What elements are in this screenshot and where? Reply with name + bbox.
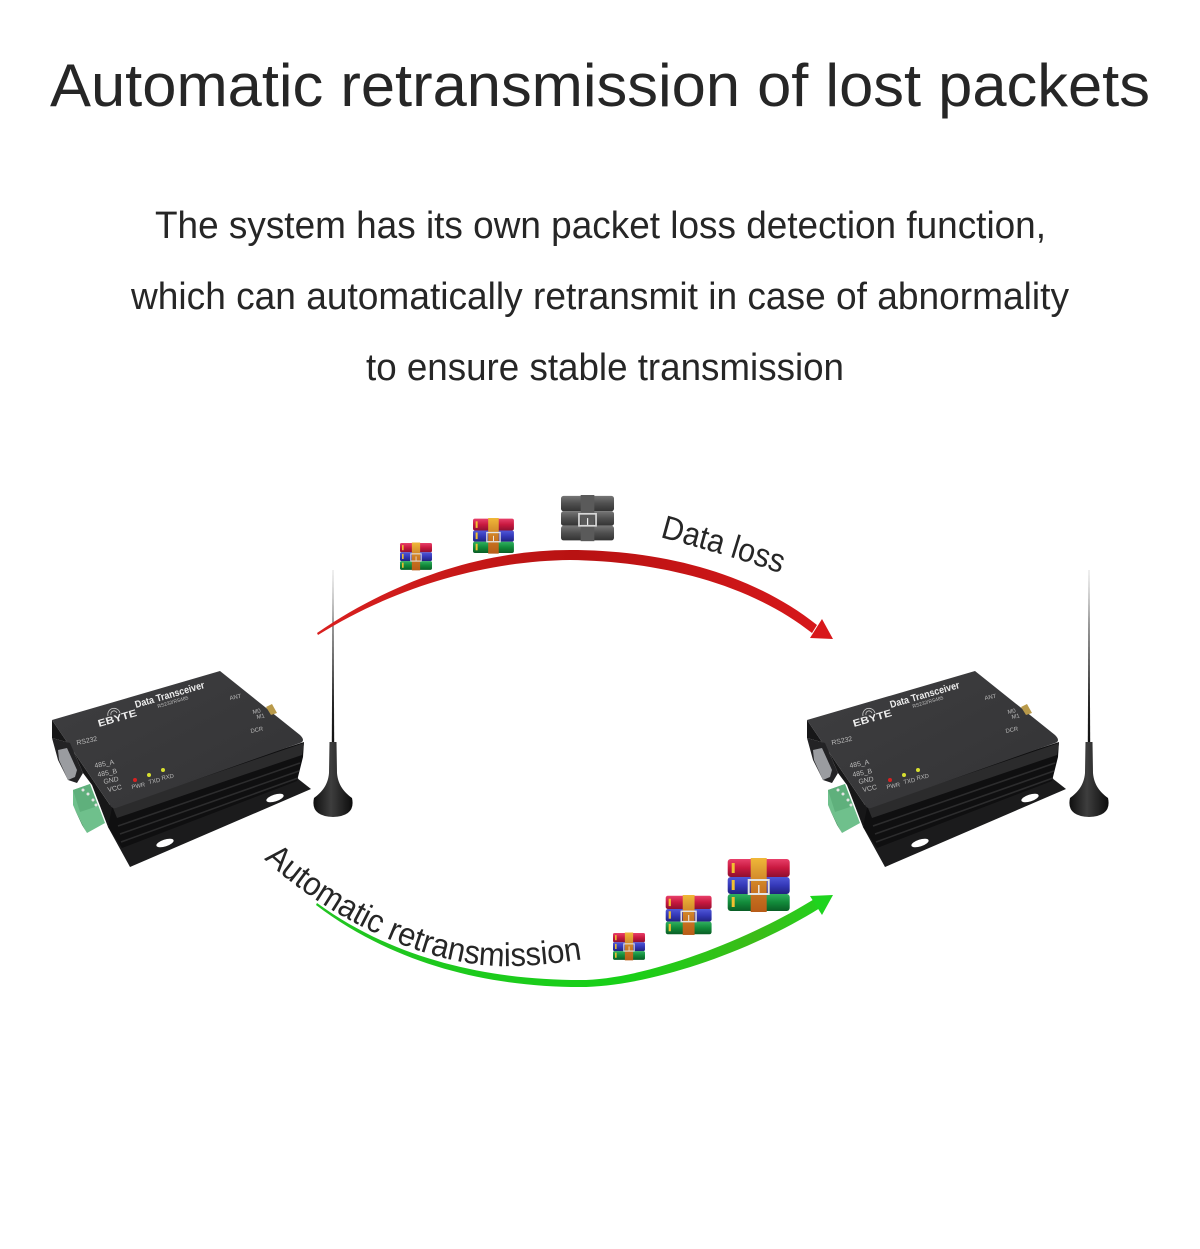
green terminal block [828, 784, 860, 833]
panel labels: RS232/RS485 [157, 695, 189, 710]
icon: medium package top [473, 518, 514, 554]
green terminal block [73, 784, 105, 833]
panel labels: 485_B [852, 768, 873, 779]
panel labels: Data Transceiver [889, 680, 961, 711]
panel labels: RXD [161, 774, 175, 782]
mounting flange [108, 778, 311, 867]
left side wedge [807, 720, 867, 827]
panel labels: DCR [1005, 726, 1019, 735]
panel labels: 485_B [97, 768, 118, 779]
arrow: red data loss [317, 550, 833, 639]
label: Data loss: Data loss [662, 516, 784, 572]
top face [807, 671, 1058, 808]
DB9 connector [52, 738, 83, 783]
logo signal mark [108, 708, 120, 716]
panel labels: RXD [916, 774, 930, 782]
panel labels: TXD [148, 778, 161, 786]
title: Automatic retransmission of lost packets [50, 52, 1150, 119]
panel labels: ANT [984, 694, 997, 702]
panel labels: M1 [1011, 713, 1020, 721]
panel labels: GND [858, 776, 874, 786]
SMA connector [1021, 704, 1032, 715]
SMA connector [266, 704, 277, 715]
icon: grey lost package [561, 495, 614, 541]
panel labels: VCC [862, 784, 878, 794]
DB9 connector [807, 738, 838, 783]
top face [52, 671, 303, 808]
panel labels: VCC [107, 784, 123, 794]
panel labels: RS232 [76, 736, 98, 747]
panel labels: ANT [229, 694, 242, 702]
panel labels: EBYTE [852, 708, 894, 730]
body side with fins [108, 742, 304, 848]
panel labels [831, 680, 1020, 794]
LEDs [133, 778, 137, 782]
panel labels: RS232 [831, 736, 853, 747]
left side wedge [52, 720, 112, 827]
logo signal mark [863, 708, 875, 716]
panel labels: DCR [250, 726, 264, 735]
LEDs [888, 778, 892, 782]
icon: medium package bottom [666, 895, 712, 935]
panel labels: 485_A [94, 759, 115, 770]
description text: which can automatically retransmit in case of abnormality [130, 276, 1069, 318]
antenna: left [313, 570, 353, 817]
panel labels: M0 [252, 708, 262, 716]
device: right transceiver [807, 671, 1066, 867]
panel labels: M1 [256, 713, 265, 721]
device: left transceiver [52, 671, 311, 867]
description text: The system has its own packet loss detection function, [155, 205, 1046, 247]
body side with fins [863, 742, 1059, 848]
arrow: green retransmission [316, 895, 833, 987]
description text: to ensure stable transmission [366, 347, 844, 389]
panel labels: GND [103, 776, 119, 786]
panel labels: TXD [903, 778, 916, 786]
antenna: right [1069, 570, 1109, 817]
panel labels: PWR [886, 782, 901, 791]
panel labels: PWR [131, 782, 146, 791]
panel labels: M0 [1007, 708, 1017, 716]
panel labels: 485_A [849, 759, 870, 770]
icon: small package top [400, 542, 432, 570]
label: Automatic retransmission: Automatic retransmission [264, 848, 580, 966]
icon: large package bottom [728, 858, 790, 912]
panel labels: Data Transceiver [134, 680, 206, 711]
panel labels: RS232/RS485 [912, 695, 944, 710]
panel labels: EBYTE [97, 708, 139, 730]
panel labels [76, 680, 265, 794]
mounting flange [863, 778, 1066, 867]
icon: small package bottom [613, 932, 645, 960]
description text [130, 205, 1069, 389]
